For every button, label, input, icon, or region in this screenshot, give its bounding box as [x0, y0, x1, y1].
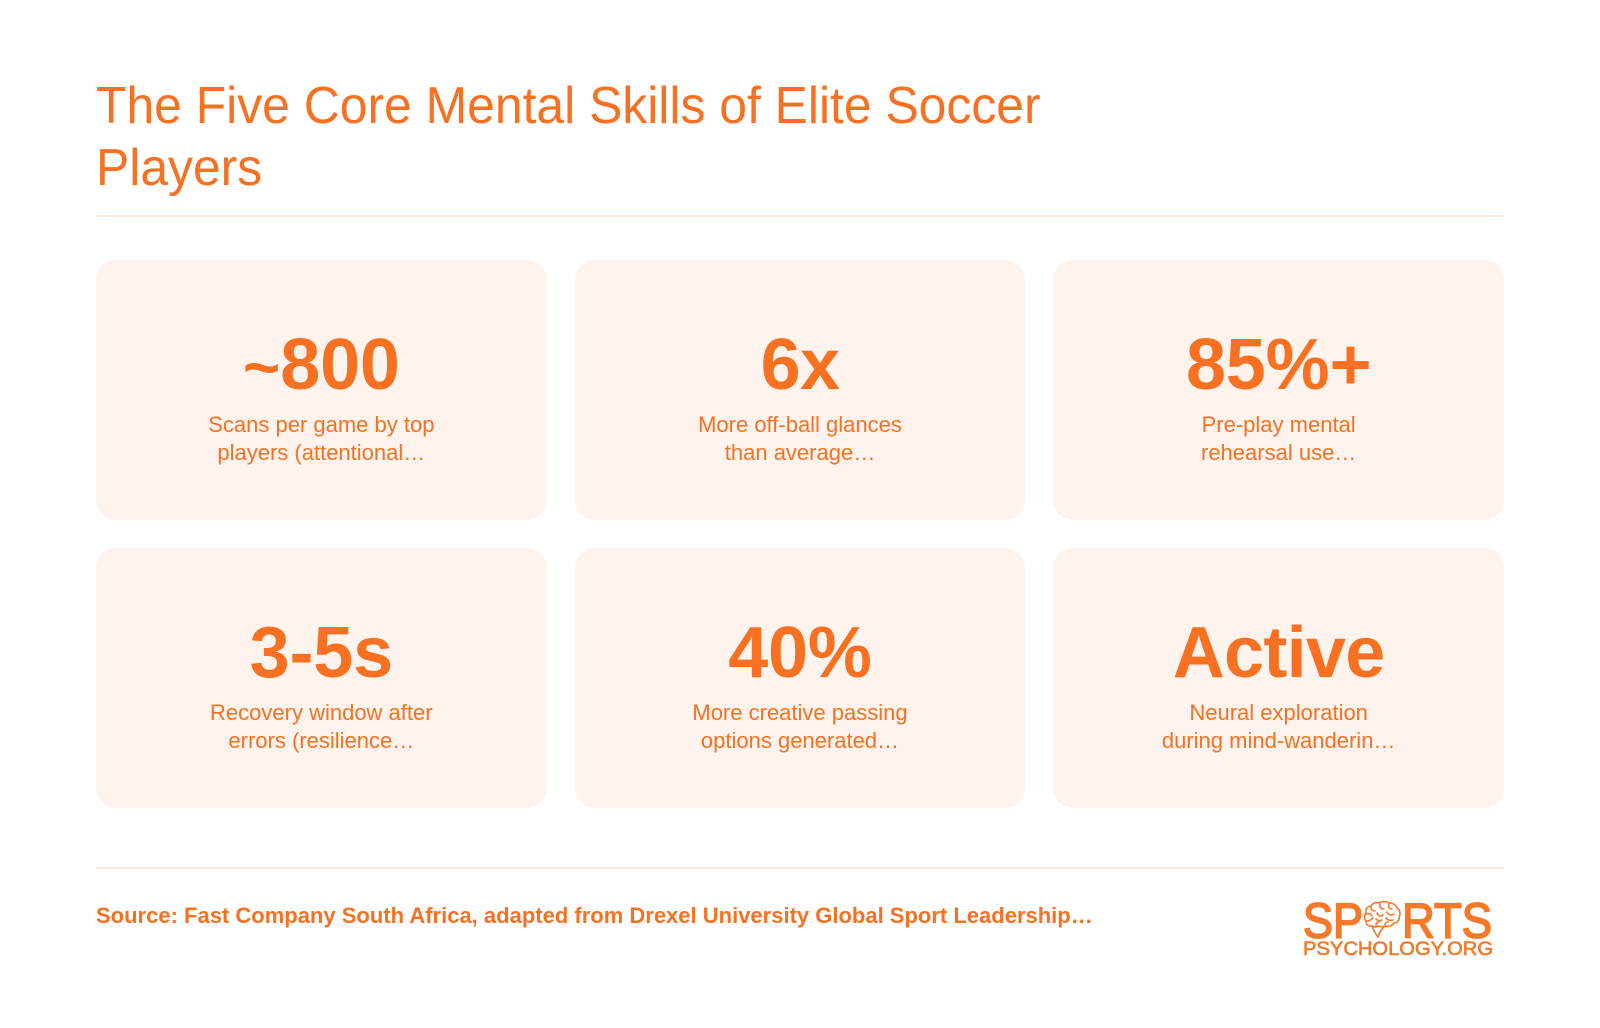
- caption: neural: during mind-wanderin…: [1162, 728, 1395, 753]
- panel: mental rehearsal: [1053, 260, 1504, 520]
- caption: neural: Neural exploration: [1189, 700, 1368, 725]
- stat: Active: Active: [1173, 613, 1385, 693]
- caption: scans: Scans per game by top: [208, 412, 434, 437]
- caption: scans: players (attentional…: [217, 440, 425, 465]
- panel: recovery window: [96, 548, 547, 808]
- source note: Source: Fast Company South Africa, adapted from Drexel University Global Sport Leadership…: [96, 903, 1093, 928]
- stat: 85%+: 85%+: [1186, 325, 1371, 405]
- logo wordmark left: SP: [1303, 894, 1363, 948]
- caption: recovery: errors (resilience…: [228, 728, 414, 753]
- caption: scans: [208, 412, 434, 465]
- caption: rehearsal: Pre-play mental: [1202, 412, 1356, 437]
- logo subline: PSYCHOLOGY.ORG: [1303, 939, 1493, 960]
- caption: neural: [1162, 700, 1395, 753]
- panel: off-ball glances: [575, 260, 1025, 520]
- icon: brain: [1364, 902, 1400, 937]
- logo wordmark right: RTS: [1402, 894, 1492, 948]
- panel: neural exploration: [1053, 548, 1504, 808]
- stat: 3-5s: 3-5s: [250, 613, 393, 693]
- caption: passing: [692, 700, 908, 753]
- caption: passing: More creative passing: [692, 700, 908, 725]
- stat: ~800: ~800: [243, 325, 400, 405]
- panel: creative passing: [575, 548, 1025, 808]
- panel: scans per game: [96, 260, 547, 520]
- caption: rehearsal: rehearsal use…: [1201, 440, 1356, 465]
- caption: recovery: Recovery window after: [210, 700, 433, 725]
- caption: glances: [698, 412, 902, 465]
- caption: rehearsal: [1201, 412, 1356, 465]
- caption: recovery: [210, 700, 433, 753]
- caption: passing: options generated…: [701, 728, 899, 753]
- caption: glances: than average…: [725, 440, 875, 465]
- stat: 40%: 40%: [728, 613, 872, 693]
- title: The Five Core Mental Skills of Elite Soccer: [96, 77, 1041, 135]
- stat: 6x: 6x: [761, 325, 839, 405]
- title: [96, 77, 1041, 197]
- caption: glances: More off-ball glances: [698, 412, 902, 437]
- title: Players: [96, 139, 262, 197]
- logo: Sports Psychology.org: [1303, 894, 1493, 960]
